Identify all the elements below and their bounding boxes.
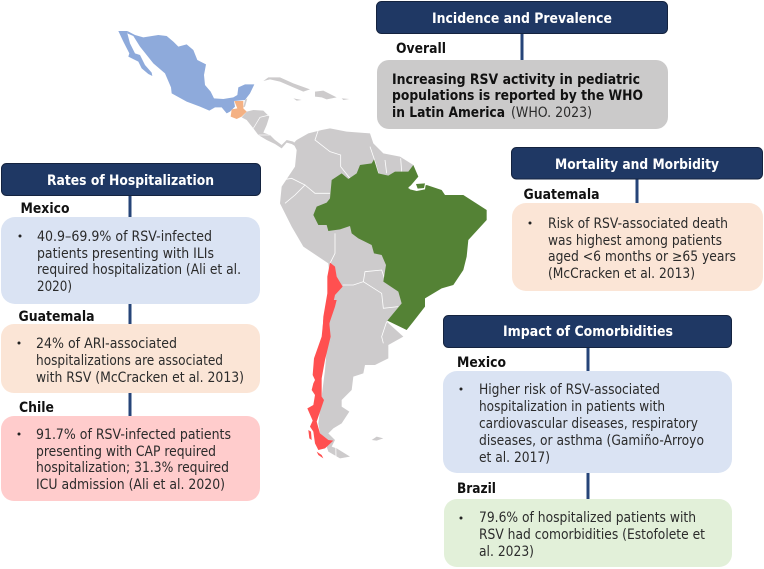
label: Guatemala: Guatemala — [524, 187, 600, 203]
map: Central America and Caribbean (grey) — [242, 77, 349, 148]
box text: with RSV (McCracken et al. 2013) — [36, 370, 244, 386]
green text box — [444, 499, 732, 567]
box text: in Latin America — [392, 105, 505, 121]
box text — [18, 336, 244, 386]
box text: 24% of ARI-associated — [36, 336, 177, 352]
panel: mortality and morbidity — [512, 148, 763, 291]
box text — [460, 510, 705, 560]
heading text: Impact of Comorbidities — [503, 324, 673, 340]
box text: (WHO. 2023) — [511, 105, 592, 121]
box text: 2020) — [37, 279, 72, 295]
box text: Risk of RSV-associated death — [548, 216, 728, 232]
box text: Increasing RSV activity in pediatric — [392, 72, 640, 88]
peach text box — [1, 324, 260, 393]
heading text: Mortality and Morbidity — [555, 157, 719, 173]
label: Guatemala: Guatemala — [18, 309, 94, 325]
box text: 79.6% of hospitalized patients with — [479, 510, 696, 526]
box text: was highest among patients — [548, 233, 722, 249]
grey text box — [377, 60, 668, 129]
box text: ICU admission (Ali et al. 2020) — [36, 477, 225, 493]
map: Guatemala — [231, 101, 247, 119]
header: mortality and morbidity — [512, 148, 762, 179]
peach text box — [512, 203, 763, 291]
box text: hospitalization in patients with — [479, 399, 665, 415]
map: Falkland Islands — [372, 437, 383, 441]
box text — [18, 229, 241, 295]
header: rates of hospitalization — [2, 164, 260, 196]
map: Brazil — [313, 159, 487, 330]
box text: cardiovascular diseases, respiratory — [479, 416, 698, 432]
label: overall: Overall — [396, 41, 446, 57]
blue text box — [443, 371, 732, 473]
box text: 40.9–69.9% of RSV-infected — [37, 229, 212, 245]
box text: hospitalization; 31.3% required — [36, 460, 229, 476]
box text: aged <6 months or ≥65 years — [548, 249, 736, 265]
box text: al. 2023) — [479, 544, 534, 560]
label: Brazil: Brazil — [457, 481, 496, 497]
panel: impact of comorbidities — [443, 316, 732, 567]
connector — [520, 33, 524, 61]
box text: required hospitalization (Ali et al. — [37, 262, 241, 278]
box text: (McCracken et al. 2013) — [548, 266, 695, 282]
box text — [18, 427, 231, 493]
box text — [392, 72, 643, 121]
box text: patients presenting with ILIs — [37, 246, 214, 262]
box text: presenting with CAP required — [36, 444, 216, 460]
blue text box — [1, 217, 260, 304]
label: Mexico: Mexico — [20, 201, 70, 217]
panel: incidence and prevalence — [376, 2, 668, 129]
box text: diseases, or asthma (Gamiño-Arroyo — [479, 433, 704, 449]
label: Chile: Chile — [19, 400, 54, 416]
box text: et al. 2017) — [479, 450, 550, 466]
box text: RSV had comorbidities (Estofolete et — [479, 527, 705, 543]
map: Mexico — [118, 31, 254, 113]
connector — [586, 347, 590, 499]
header: impact of comorbidities — [444, 316, 732, 348]
connector — [636, 179, 638, 204]
connector — [128, 196, 132, 416]
header: incidence and prevalence — [376, 2, 668, 34]
box text — [460, 382, 704, 466]
heading text: Incidence and Prevalence — [432, 11, 612, 27]
box text: Higher risk of RSV-associated — [479, 382, 660, 398]
panel: rates of hospitalization — [1, 164, 260, 501]
red text box — [1, 416, 260, 501]
box text: 91.7% of RSV-infected patients — [36, 427, 231, 443]
box text: populations is reported by the WHO — [392, 88, 643, 104]
box text: hospitalizations are associated — [36, 353, 223, 369]
map of Latin America — [118, 31, 487, 458]
heading text: Rates of Hospitalization — [47, 173, 214, 189]
map: Chile — [307, 263, 343, 458]
map: South America (grey) — [280, 128, 413, 458]
box text — [528, 216, 736, 282]
label: Mexico: Mexico — [457, 355, 506, 371]
